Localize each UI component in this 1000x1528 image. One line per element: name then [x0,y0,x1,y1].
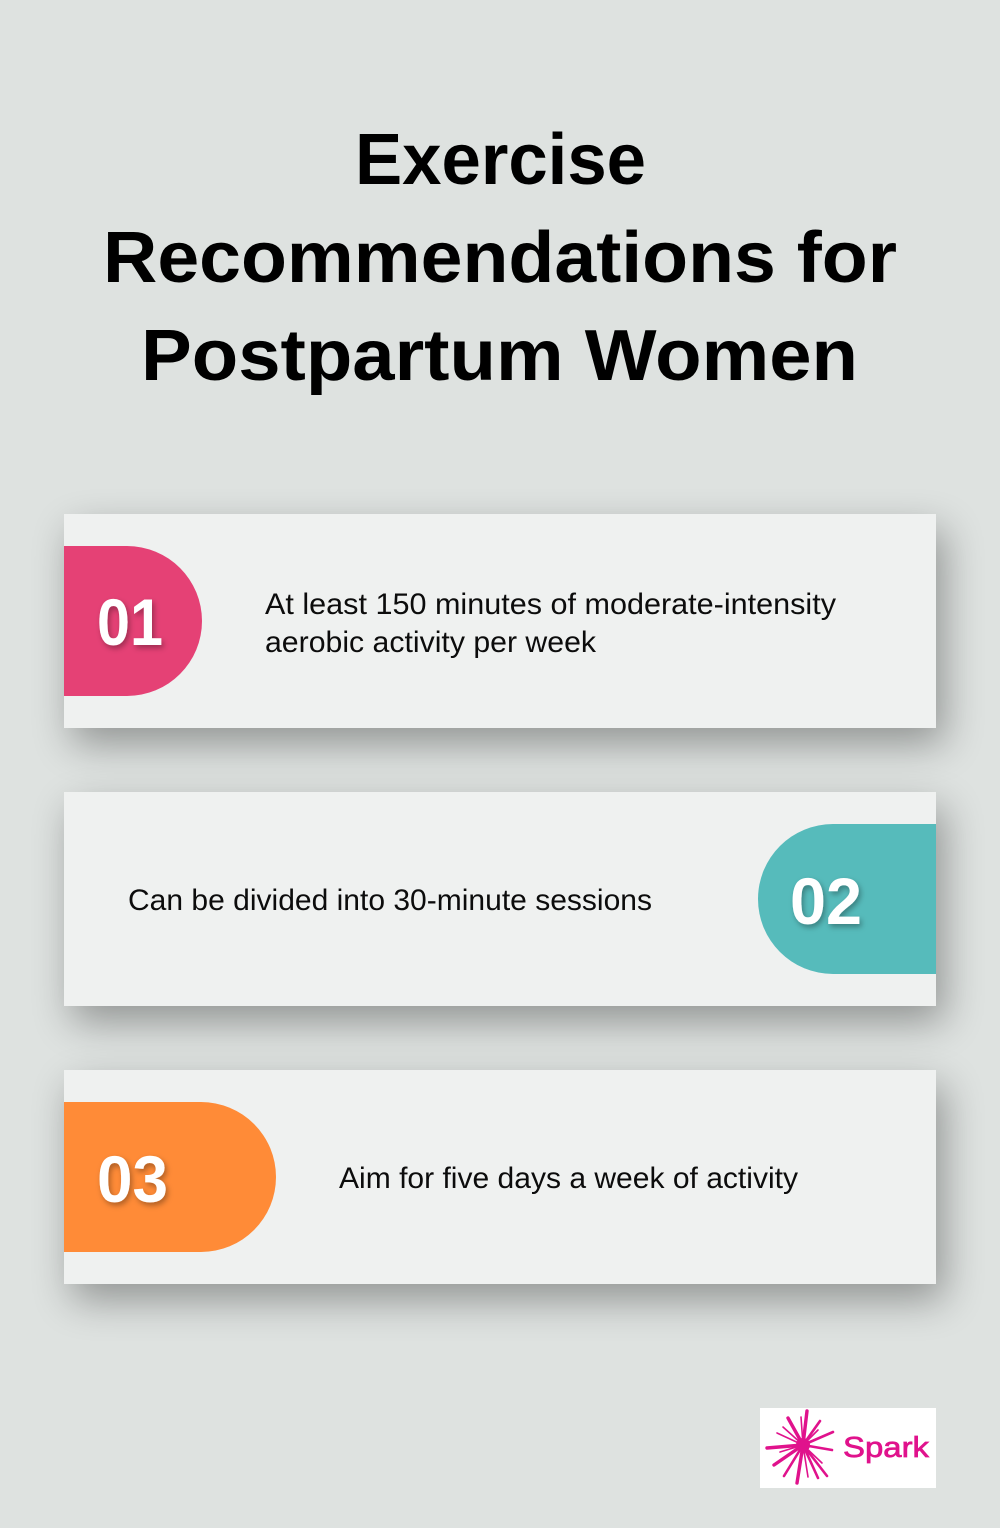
badge 03 [64,1102,276,1252]
text: 150 minutes: aerobic activity per week [265,626,597,659]
text: 30-minute sessions: Can be divided into 30-minute sessions [128,884,652,917]
badge 01: 01 [97,585,163,659]
icon: starburst [767,1411,833,1483]
wordmark: Spark [843,1432,930,1464]
text: 150 minutes [265,588,836,659]
badge 02: 02 [790,864,862,938]
badge 03: 03 [97,1142,168,1216]
badge 01 [64,546,202,696]
title: Postpartum Women [141,316,858,396]
text: 150 minutes: At least 150 minutes of moderate-intensity [265,588,836,621]
badge 02 [758,824,936,974]
panel: recommendation 03 [64,1070,944,1300]
panel: recommendation 01 [64,514,944,744]
panel: recommendation 02 [64,792,944,1022]
text: five days a week: Aim for five days a week of activity [339,1162,798,1195]
logo: Spark [760,1408,936,1488]
title [103,120,897,396]
title: Recommendations for [103,218,897,298]
title: Exercise [355,120,646,200]
